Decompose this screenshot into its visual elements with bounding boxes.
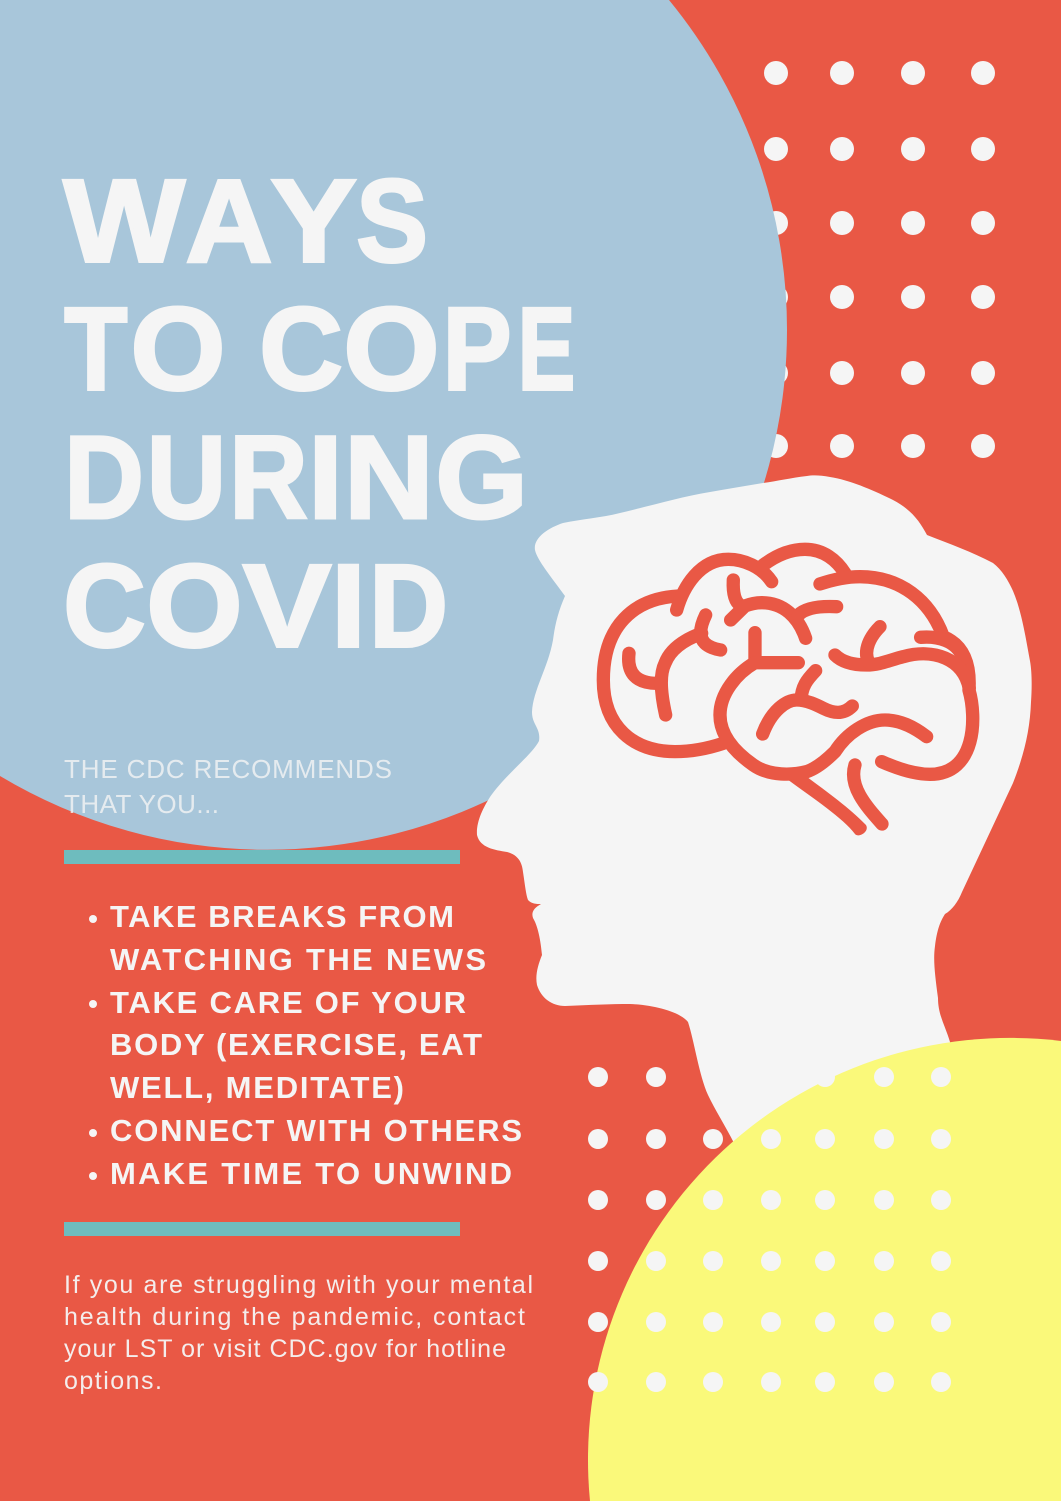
title: R [229,412,308,544]
yellow circle [588,1038,1061,1501]
closing note: If you are struggling with your mental [64,1271,533,1299]
bullet list: BODY (EXERCISE, EAT [110,1027,482,1062]
bullet list [89,899,522,1191]
title: P [443,284,512,416]
closing note: health during the pandemic, contact [64,1303,525,1331]
title: S [356,156,428,288]
title: V [243,540,331,672]
bullet list: TAKE CARE OF YOUR [110,985,466,1020]
bullet list: CONNECT WITH OTHERS [110,1113,522,1148]
title: C [63,540,146,672]
title [63,156,575,672]
title: U [147,412,226,544]
title: I [308,412,343,544]
closing note [64,1271,533,1395]
subheading: THAT YOU... [64,789,219,819]
closing note: options. [64,1367,162,1395]
title: D [64,412,144,544]
title: A [186,156,272,288]
subheading [64,754,392,819]
title: Y [271,156,357,288]
icon: brain [603,549,973,835]
dot grid: top right [764,61,995,458]
title: W [63,156,186,288]
title: T [64,284,127,416]
subheading: THE CDC RECOMMENDS [64,754,392,784]
title: E [518,284,575,416]
bullet list: WELL, MEDITATE) [110,1070,404,1105]
title: C [259,284,343,416]
bullet list: WATCHING THE NEWS [110,942,486,977]
title: D [369,540,448,672]
title: N [344,412,434,544]
head silhouette [477,475,1032,1300]
divider bar bottom [64,1222,460,1236]
title: I [331,540,366,672]
dot grid: bottom [588,1067,951,1392]
divider bar top [64,850,460,864]
title: O [343,284,440,416]
bullet list: TAKE BREAKS FROM [110,899,454,934]
bullet list: MAKE TIME TO UNWIND [110,1156,512,1191]
blue circle [0,0,787,850]
title: O [130,284,226,416]
closing note: your LST or visit CDC.gov for hotline [64,1335,506,1363]
title: G [436,412,528,544]
title: O [146,540,243,672]
